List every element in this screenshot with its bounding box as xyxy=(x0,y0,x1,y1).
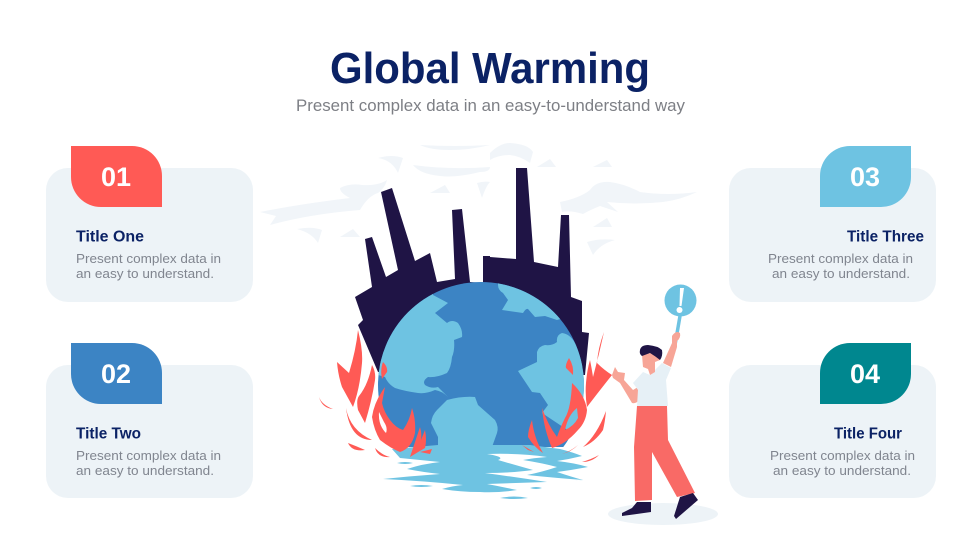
text block: card 01: an easy to understand. xyxy=(76,266,214,281)
panel: card 03 xyxy=(729,146,936,302)
hair xyxy=(640,345,662,360)
subtitle: Present complex data in an easy-to-understand way xyxy=(296,96,685,115)
text block: card 03: an easy to understand. xyxy=(772,266,910,281)
heading: title one: Title One xyxy=(76,228,144,246)
shirt xyxy=(633,363,671,406)
head xyxy=(642,352,660,375)
number tab 04: 04 xyxy=(850,359,880,389)
panel: card 02 xyxy=(46,343,253,498)
title: Global Warming xyxy=(330,44,650,93)
number tab 02: 02 xyxy=(101,359,131,389)
number tab 02 xyxy=(71,343,162,404)
text block: card 01: Present complex data in xyxy=(76,251,221,266)
number tab 03 xyxy=(820,146,911,207)
panel: card 01 xyxy=(46,146,253,302)
globe land: lower centre xyxy=(431,397,498,447)
heading: title four: Title Four xyxy=(834,426,902,442)
globe land: upper left xyxy=(378,294,462,396)
text block: card 04 xyxy=(770,448,915,478)
text block: card 03: Present complex data in xyxy=(768,251,913,266)
heading: title two: Title Two xyxy=(76,426,141,442)
warning sign xyxy=(664,284,696,345)
text block: card 02 xyxy=(76,448,221,478)
text block: card 01 xyxy=(76,251,221,281)
illustration: flames left xyxy=(319,330,432,457)
number tab 04 xyxy=(820,343,911,404)
globe land: right xyxy=(518,333,584,430)
trousers xyxy=(634,406,695,501)
text block: card 04: an easy to understand. xyxy=(773,463,911,478)
water puddles xyxy=(397,462,542,499)
heading: title three: Title Three xyxy=(847,228,924,246)
lower arm xyxy=(612,367,639,403)
text block: card 04: Present complex data in xyxy=(770,448,915,463)
number tab 01 xyxy=(71,146,162,207)
number tab 01: 01 xyxy=(101,162,131,192)
water slits xyxy=(485,454,583,483)
globe land: upper right xyxy=(498,283,560,320)
text block: card 02: Present complex data in xyxy=(76,448,221,463)
number tab 03: 03 xyxy=(850,162,880,192)
raised arm xyxy=(663,332,680,367)
illustration: flames right xyxy=(522,332,612,462)
shoes xyxy=(622,502,651,516)
illustration: melting water xyxy=(383,445,588,499)
illustration: factory silhouette xyxy=(355,168,589,375)
ground shadow xyxy=(608,503,718,525)
illustration: person with warning sign xyxy=(608,284,718,525)
panel: card 04 xyxy=(729,343,936,498)
text block: card 03 xyxy=(768,251,913,281)
text block: card 02: an easy to understand. xyxy=(76,463,214,478)
illustration: globe xyxy=(378,282,584,447)
illustration: smoke clouds xyxy=(260,143,697,255)
